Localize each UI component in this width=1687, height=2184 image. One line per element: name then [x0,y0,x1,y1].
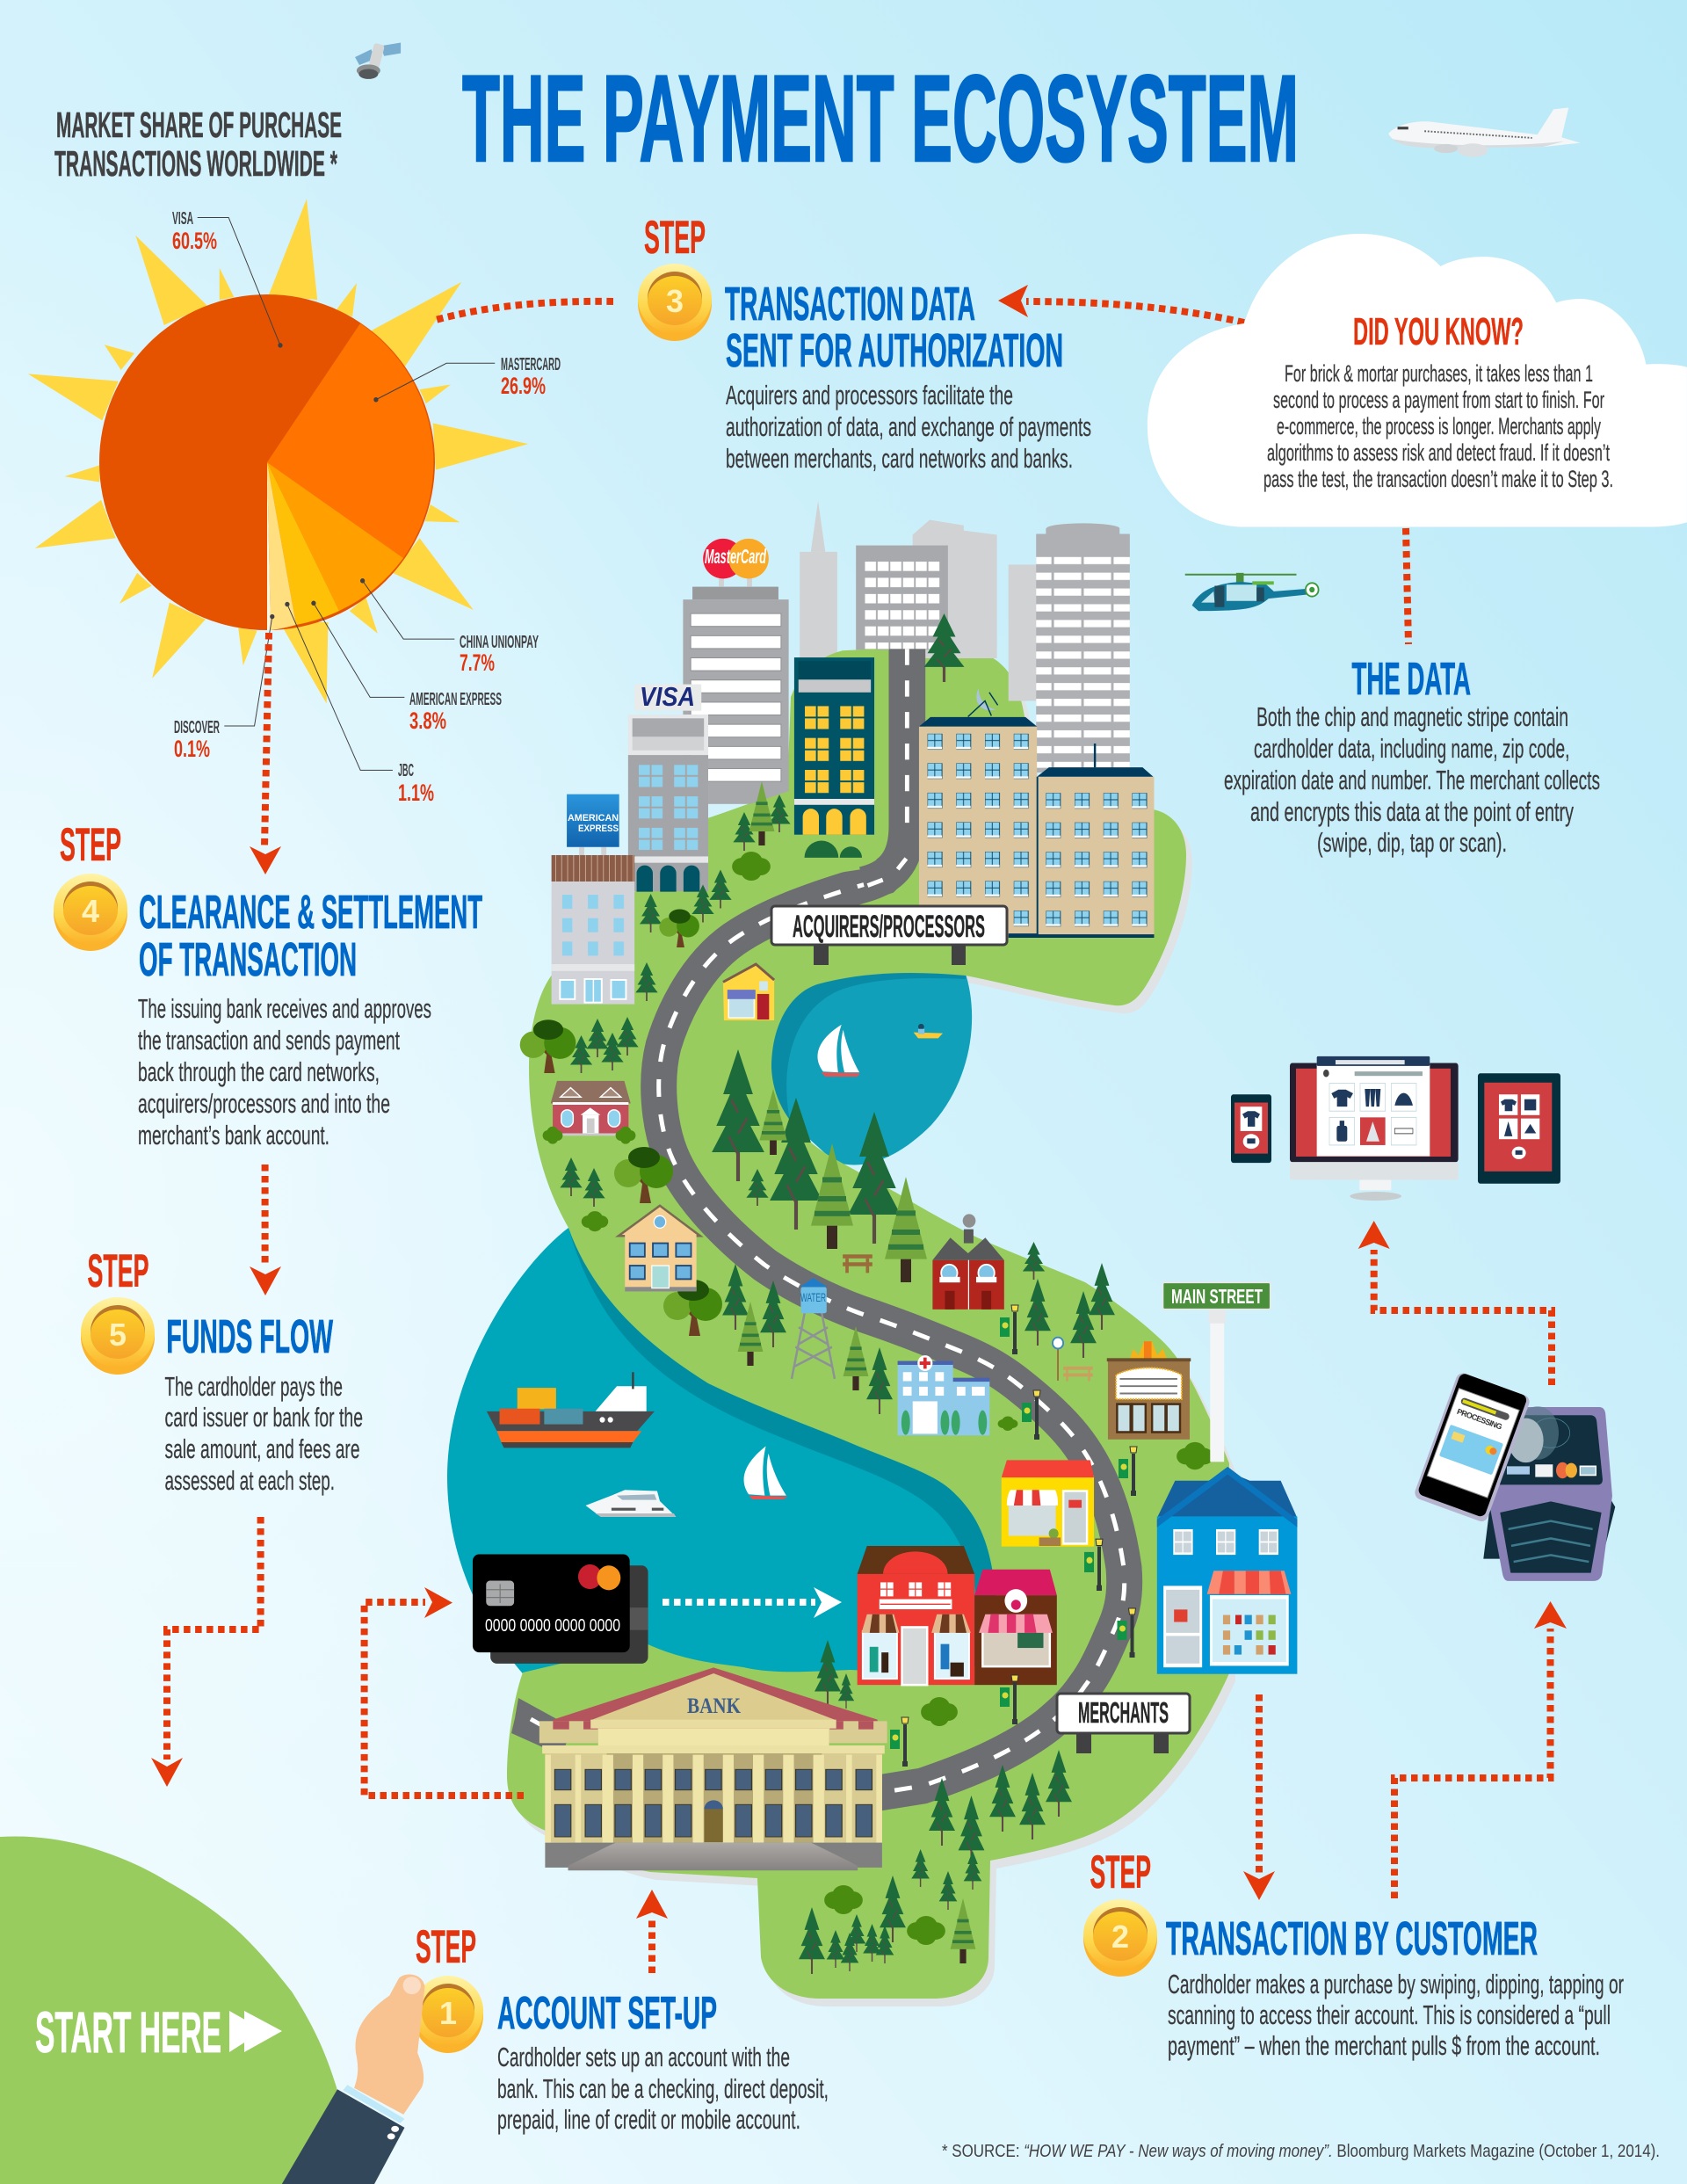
satellite dish [968,688,998,716]
credit card [473,1555,648,1664]
labels: pie chart: VISA [172,209,193,229]
heading: did you know: DID YOU KNOW? [1353,310,1524,353]
step 3: STEP [644,212,706,264]
land [507,649,1229,1999]
American Express sign [567,795,619,855]
arrow: merchant to step 2 [1243,1694,1275,1900]
brand logos text: AMERICAN [568,813,619,824]
cuff [343,2085,404,2123]
step 3 [638,212,1091,474]
arrow: terminal to devices [1358,1221,1552,1385]
coin 5 [81,1297,155,1375]
coin 3: 3 [666,283,684,319]
sailboat [818,1025,860,1077]
step 4: the transaction and sends payment [138,1025,400,1056]
step 4: acquirers/processors and into the [138,1088,390,1119]
step 5: The cardholder pays the [165,1371,343,1402]
step 4 [54,819,482,1150]
step 5: sale amount, and fees are [165,1433,360,1464]
left grey building [552,855,634,1005]
labels: pie chart: DISCOVER [174,718,220,737]
pie chart: market share [99,294,435,630]
step 1: STEP [416,1921,476,1973]
helicopter [1185,573,1319,611]
trees: dark pines [560,613,1115,1974]
devices: phone tablet monitor [1231,1056,1560,1201]
labels: pie chart: 0.1% [174,736,210,762]
yellow shop [723,964,774,1020]
heading: start here: START HERE [35,1999,221,2064]
phone card [1439,1425,1503,1475]
coin 2: 2 [1111,1919,1129,1955]
section: the data [1224,654,1600,858]
monitor [1290,1056,1459,1201]
labels: pie chart [172,209,561,806]
step 4: STEP [60,819,121,871]
arrow: step 3 to sun [436,301,613,320]
step 1: ACCOUNT SET-UP [497,1988,717,2039]
labels: pie chart: 1.1% [398,780,434,806]
red double house [932,1214,1004,1310]
leader lines [198,217,495,770]
step 5: FUNDS FLOW [166,1310,333,1363]
sign: merchants [1057,1694,1190,1753]
slice: China UnionPay [267,462,403,611]
grey office [856,546,948,649]
ship [487,1372,655,1448]
text: MASTERCARD [501,355,561,374]
bank [539,1667,887,1870]
phone screen label: PROCESSING [1456,1407,1503,1432]
smartphone [1413,1371,1531,1523]
teal building [794,657,874,858]
step 1: Cardholder sets up an account with the [497,2042,790,2072]
tan building right [1037,744,1154,934]
brand logos text [568,545,767,834]
sign: acquirers/processors [771,906,1007,965]
bay [764,970,972,1165]
MasterCard building [683,539,789,804]
coin 4 [54,874,127,951]
Visa building [628,685,708,892]
icon: sun rays [28,199,528,703]
step 3: TRANSACTION DATA [725,278,975,330]
sign: acquirers/processors: ACQUIRERS/PROCESSORS [793,910,985,944]
city: upper buildings [551,501,1154,1136]
hand holding coin [282,1975,424,2184]
labels: pie chart: 7.7% [460,649,495,676]
sign text: main street: MAIN STREET [1171,1285,1263,1308]
background skyline [800,501,1039,701]
bank label: BANK [687,1694,741,1718]
step 4: The issuing bank receives and approves [138,993,431,1024]
arrow: step 4 to step 5 [250,1165,281,1295]
cylinder tower [1036,523,1130,773]
bench [843,1254,872,1273]
payment terminal [1483,1406,1615,1581]
step 3: SENT FOR AUTHORIZATION [726,324,1063,377]
arrow: step 5 to start [151,1517,261,1787]
heading: market share [54,105,342,184]
heading: market share: TRANSACTIONS WORLDWIDE * [54,143,337,184]
arrow: sun to step 4 [250,633,281,874]
step 1 [413,1921,829,2135]
sailboat: lake [744,1446,788,1499]
cafe [974,1570,1057,1685]
step 4: merchant’s bank account. [138,1120,329,1150]
step 3: between merchants, card networks and banks. [726,443,1073,474]
hospital [898,1355,989,1435]
phone [1231,1094,1271,1163]
step 5 [81,1245,363,1496]
shops lamp posts [890,1305,1137,1767]
icon: double arrow [229,2011,282,2052]
step 5: card issuer or bank for the [165,1402,363,1433]
tablet [1478,1073,1560,1184]
water tower label: WATER [800,1290,826,1304]
coin 5: 5 [109,1317,127,1353]
bushes [543,852,1213,1945]
labels: pie chart: JBC [398,761,414,780]
section: the data: (swipe, dip, tap or scan). [1317,827,1507,858]
labels: pie chart: 60.5% [172,228,217,254]
street sign post [1162,1282,1271,1462]
text: did you know [1263,360,1613,492]
tan house [619,1206,700,1291]
green hill over skyline [708,649,876,893]
blue merchant building [1157,1467,1297,1674]
road in front of hill [859,649,925,901]
coin 4: 4 [82,893,99,929]
step 3: authorization of data, and exchange of payments [726,411,1091,442]
dotted connector: cloud to the data [1406,528,1408,644]
arrow: bank to card [365,1587,524,1796]
coin 2 [1083,1899,1157,1977]
step 5: STEP [88,1245,149,1297]
coin 1 [413,1976,483,2053]
labels: pie chart: 26.9% [501,373,546,399]
section: the data: THE DATA [1351,654,1471,705]
red brick house [551,1081,631,1136]
step 4: CLEARANCE & SETTLEMENT [139,886,482,939]
coin 1: 1 [439,1995,457,2031]
slice: JBC [267,462,296,630]
water tower [792,1278,835,1379]
arrow: step 2 to terminal [1394,1601,1567,1898]
step 5: assessed at each step. [165,1465,335,1496]
card number: 0000 0000 0000 0000 [485,1616,620,1636]
yacht [586,1490,676,1517]
hand [354,1975,424,2115]
step 2: STEP [1090,1847,1151,1898]
sleeve [282,2089,404,2184]
labels: pie chart: CHINA UNIONPAY [460,633,539,652]
theater [1107,1341,1191,1440]
red fashion shop [858,1546,974,1685]
step 2 [1083,1847,1624,2061]
icon: satellite [355,42,401,79]
tan building left [919,717,1154,938]
trees: light pines [738,781,975,1963]
yellow shop [1002,1460,1094,1547]
cloud panel [1148,234,1687,527]
arrow: cloud to step 3 [998,285,1244,323]
step 4: back through the card networks, [138,1056,380,1087]
step 1: bank. This can be a checking, direct deposit, [497,2073,829,2104]
slice: Discover [267,462,271,630]
brand logos text: MasterCard [705,545,767,568]
brand logos text: EXPRESS [578,824,619,834]
canoe [914,1024,943,1038]
lake [447,1228,1002,1679]
brand logos text: VISA [640,681,695,712]
slice: American Express [267,462,339,625]
icon: airplane [1388,107,1581,157]
arrow: card to merchants [662,1587,842,1618]
step 4: OF TRANSACTION [139,933,357,986]
trees: round trees [520,909,722,1336]
land shadow [513,657,1235,2006]
bus stop and bench [1053,1338,1093,1381]
sign: merchants: MERCHANTS [1078,1696,1169,1729]
start here panel [0,1836,350,2184]
slice: Mastercard [267,323,433,558]
heading: market share: MARKET SHARE OF PURCHASE [56,105,342,145]
coin 3 [638,264,712,341]
labels: pie chart: AMERICAN EXPRESS [409,690,502,709]
road [511,649,1125,1793]
labels: pie chart: 3.8% [409,707,446,734]
step 1: prepaid, line of credit or mobile account. [497,2104,800,2135]
mid town buildings [619,1206,1271,1685]
arrow: step 1 to bank [636,1890,668,1973]
step 3: Acquirers and processors facilitate the [726,380,1013,410]
